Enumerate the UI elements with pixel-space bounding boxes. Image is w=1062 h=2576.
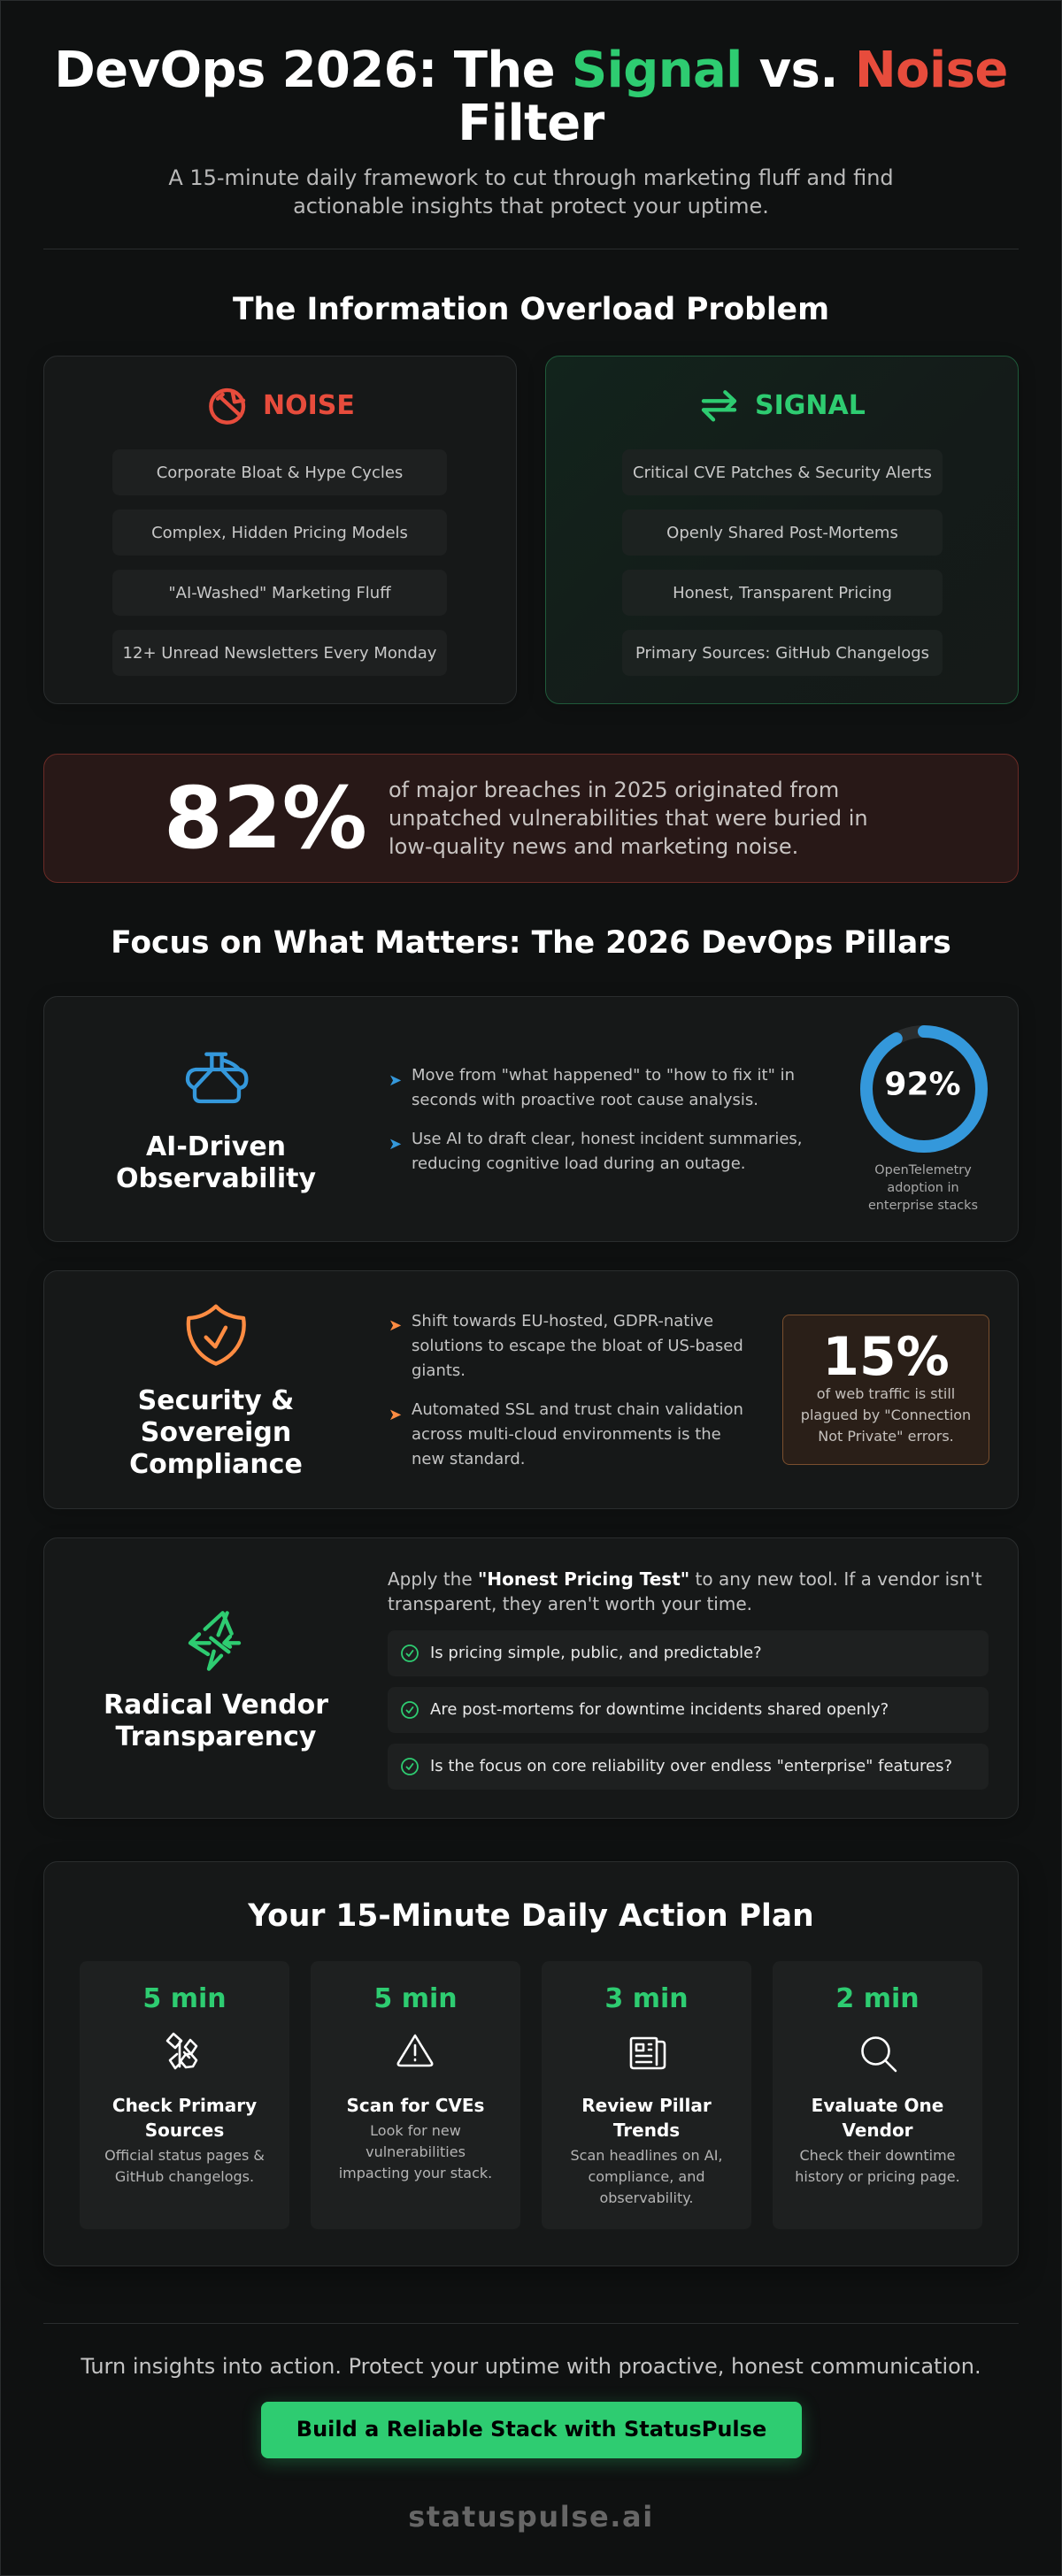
step description: impacting your stack.: [339, 2165, 492, 2181]
bullet text: giants.: [412, 1361, 466, 1380]
panel: security and compliance: [43, 1270, 1019, 1509]
title: Security & Sovereign Compliance: Compliance: [129, 1449, 303, 1480]
step description: observability.: [599, 2189, 694, 2206]
item: [112, 570, 447, 616]
check icon: [401, 1644, 419, 1662]
donut caption: enterprise stacks: [868, 1199, 978, 1213]
icon: flask: [186, 1053, 248, 1104]
step description: history or pricing page.: [795, 2168, 960, 2185]
step title: Sources: [145, 2120, 224, 2141]
subtitle: [168, 165, 894, 218]
item: 12+ Unread Newsletters Every Monday: [123, 644, 436, 662]
title: [54, 42, 1008, 152]
callout: 82 percent: [43, 754, 1019, 883]
donut caption: adoption in: [887, 1181, 959, 1195]
step description: Check their downtime: [800, 2147, 956, 2164]
heading: action plan: Your 15-Minute Daily Action Plan: [248, 1898, 814, 1934]
icon: noise: [209, 387, 246, 425]
duration: 5 min: [373, 1983, 458, 2014]
bullet text: [412, 1400, 743, 1468]
title: AI-Driven Observability: [116, 1131, 316, 1194]
item: [112, 449, 447, 495]
bullet text: seconds with proactive root cause analysis.: [412, 1091, 758, 1109]
checklist item: [388, 1687, 989, 1733]
icon: warning: [396, 2035, 434, 2066]
step description: [570, 2147, 722, 2206]
item: Primary Sources: GitHub Changelogs: [635, 644, 929, 662]
checklist item: [388, 1630, 989, 1676]
title: Radical Vendor Transparency: [104, 1690, 328, 1752]
item: [622, 570, 943, 616]
bullet text: Use AI to draft clear, honest incident summaries,: [412, 1130, 803, 1148]
item: [622, 449, 943, 495]
item: [622, 510, 943, 556]
bullet text: [412, 1066, 795, 1109]
item: "AI-Washed" Marketing Fluff: [168, 584, 391, 602]
icon: search: [861, 2036, 897, 2072]
donut chart: 92%: [860, 1025, 988, 1153]
checklist item: Are post-mortems for downtime incidents shared openly?: [430, 1700, 889, 1719]
intro text: [388, 1568, 982, 1614]
item: [112, 630, 447, 676]
title: DevOps 2026: The Signal vs. Noise: [54, 42, 1008, 99]
bullet arrow: ➤: [389, 1135, 402, 1154]
bullet text: [412, 1130, 803, 1173]
stat caption: Not Private" errors.: [818, 1428, 954, 1445]
title: AI-Driven Observability: AI-Driven: [146, 1131, 286, 1162]
step title: Scan for CVEs: [347, 2095, 484, 2116]
step description: [104, 2147, 265, 2185]
bullet text: reducing cognitive load during an outage.: [412, 1154, 745, 1173]
stat description: of major breaches in 2025 originated from: [389, 778, 839, 802]
step title: Review Pillar: [581, 2095, 712, 2116]
item: Openly Shared Post-Mortems: [666, 524, 898, 541]
step title: Vendor: [842, 2120, 913, 2141]
stat box: 15%: [782, 1315, 989, 1465]
panel: AI-driven observability: [43, 996, 1019, 1242]
icon: vendor arrows: [188, 1611, 241, 1671]
step description: Official status pages &: [104, 2147, 265, 2164]
icon: newspaper: [630, 2036, 666, 2070]
donut caption: [868, 1163, 978, 1213]
step description: GitHub changelogs.: [115, 2168, 254, 2185]
step description: Scan headlines on AI,: [570, 2147, 722, 2164]
checklist item: Is pricing simple, public, and predictable?: [430, 1644, 762, 1662]
step description: compliance, and: [588, 2168, 705, 2185]
heading: pillars: Focus on What Matters: The 2026 DevOps Pillars: [111, 925, 951, 961]
stat number: 15%: [822, 1326, 950, 1388]
check icon: [401, 1758, 419, 1775]
checklist item: [388, 1744, 989, 1790]
panel: vendor transparency: [43, 1537, 1019, 1819]
title: Security & Sovereign Compliance: Security &: [138, 1385, 294, 1416]
step 4: [773, 1961, 982, 2229]
step description: [795, 2147, 960, 2185]
step title: Check Primary: [112, 2095, 257, 2116]
title: Filter: [458, 95, 604, 152]
step description: vulnerabilities: [366, 2143, 466, 2160]
closing text: Turn insights into action. Protect your uptime with proactive, honest communication.: [81, 2354, 981, 2379]
stat caption: plagued by "Connection: [801, 1407, 971, 1423]
step title: [112, 2095, 257, 2141]
item: Corporate Bloat & Hype Cycles: [157, 464, 403, 481]
bullet text: [412, 1312, 743, 1380]
icon: shield: [186, 1304, 246, 1366]
icon: sources: [166, 2033, 198, 2070]
button: call to action: Build a Reliable Stack with StatusPulse: [296, 2417, 766, 2442]
title: Radical Vendor Transparency: Transparency: [115, 1721, 316, 1752]
subtitle: actionable insights that protect your uptime.: [293, 194, 769, 218]
title: Radical Vendor Transparency: Radical Vendor: [104, 1690, 328, 1721]
item: Honest, Transparent Pricing: [673, 584, 892, 602]
bullets: [389, 1312, 743, 1468]
title: Security & Sovereign Compliance: [129, 1385, 303, 1480]
stat description: low-quality news and marketing noise.: [389, 834, 798, 859]
donut caption: OpenTelemetry: [874, 1163, 972, 1177]
stat description: unpatched vulnerabilities that were buried in: [389, 806, 868, 831]
step title: [812, 2095, 943, 2141]
stat caption: of web traffic is still: [817, 1385, 955, 1402]
title: Security & Sovereign Compliance: Sovereign: [141, 1417, 291, 1448]
icon: signal: [701, 390, 736, 421]
duration: 5 min: [142, 1983, 227, 2014]
footer brand: statuspulse.ai: [408, 2500, 654, 2534]
step 2: [311, 1961, 520, 2229]
item: Complex, Hidden Pricing Models: [151, 524, 408, 541]
step 1: [80, 1961, 289, 2229]
step title: [581, 2095, 712, 2141]
bullet text: Move from "what happened" to "how to fix it" in: [412, 1066, 795, 1085]
bullet text: new standard.: [412, 1450, 526, 1468]
title: AI-Driven Observability: Observability: [116, 1163, 316, 1194]
heading: signal: SIGNAL: [755, 390, 866, 421]
bullet text: across multi-cloud environments is the: [412, 1425, 721, 1444]
bullet text: Shift towards EU-hosted, GDPR-native: [412, 1312, 713, 1330]
duration: 3 min: [604, 1983, 689, 2014]
stat caption: [801, 1385, 971, 1445]
item: [622, 630, 943, 676]
subtitle: A 15-minute daily framework to cut through marketing fluff and find: [168, 165, 894, 190]
panel: daily action plan: [43, 1861, 1019, 2266]
step title: Trends: [613, 2120, 680, 2141]
check icon: [401, 1701, 419, 1719]
panel: noise: [43, 356, 517, 704]
step description: Look for new: [370, 2122, 461, 2139]
step 3: [542, 1961, 751, 2229]
bullet text: Automated SSL and trust chain validation: [412, 1400, 743, 1419]
donut chart: 92%: 92%: [884, 1067, 961, 1102]
stat: 82%: 82%: [164, 769, 367, 868]
step description: [339, 2122, 492, 2181]
panel: signal: [545, 356, 1019, 704]
item: Critical CVE Patches & Security Alerts: [633, 464, 932, 481]
stat description: [389, 778, 868, 859]
bullet arrow: ➤: [389, 1316, 402, 1335]
item: [112, 510, 447, 556]
bullets: [389, 1066, 803, 1173]
bullet arrow: ➤: [389, 1071, 402, 1090]
step title: Evaluate One: [812, 2095, 943, 2116]
intro text: Apply the "Honest Pricing Test" to any new tool. If a vendor isn't: [388, 1568, 982, 1590]
bullet text: solutions to escape the bloat of US-based: [412, 1337, 743, 1355]
intro text: transparent, they aren't worth your time.: [388, 1593, 752, 1614]
heading: information overload: The Information Overload Problem: [233, 292, 829, 327]
button: call to action: [261, 2402, 802, 2458]
checklist item: Is the focus on core reliability over endless "enterprise" features?: [430, 1757, 952, 1775]
bullet arrow: ➤: [389, 1406, 402, 1424]
duration: 2 min: [835, 1983, 920, 2014]
heading: noise: NOISE: [263, 390, 355, 421]
